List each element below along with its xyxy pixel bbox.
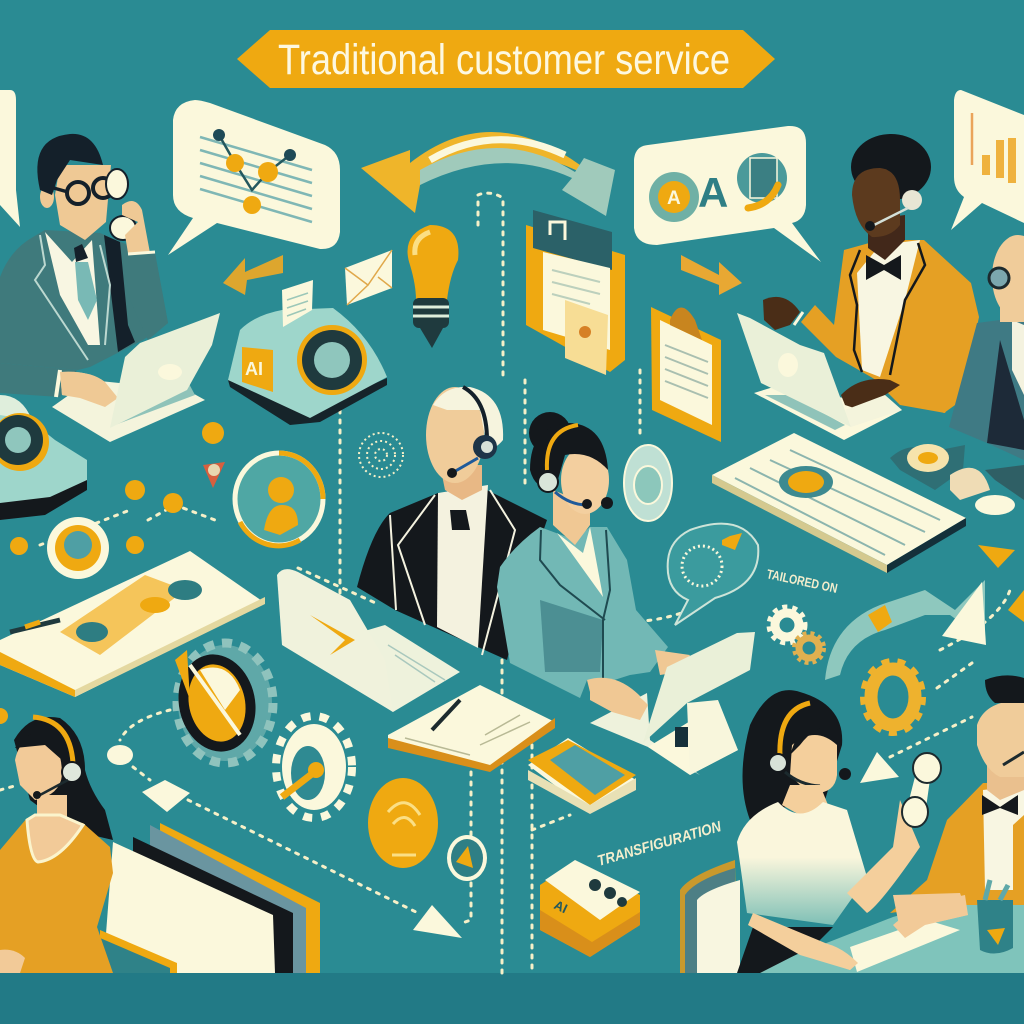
desktop keyboard and cup: [800, 880, 1013, 972]
small device AI: [540, 860, 640, 957]
icon: digital brain cloud: [359, 433, 403, 477]
title banner: Traditional customer service: [278, 36, 730, 84]
clipboard: [651, 307, 721, 442]
icon: gold coin: [368, 778, 438, 868]
icon: rings and nodes left: [10, 422, 225, 579]
icon: circular arrow button: [447, 835, 487, 881]
plate and hand: right: [890, 444, 1024, 515]
icon: AI rotary phone: AI: [245, 359, 263, 379]
curved growth arrow: [825, 545, 1024, 680]
folders and documents: [526, 210, 625, 375]
laptop: left agent: [52, 313, 220, 442]
label: transfiguration: TRANSFIGURATION: [595, 818, 724, 870]
rotary phone: left edge: [0, 395, 87, 520]
icon: cream gear: [276, 716, 352, 818]
icon: arrow left: [223, 255, 283, 295]
small device AI: AI: [552, 897, 570, 916]
speech bubble: left edge: [0, 90, 20, 227]
person: bald agent with glasses, right edge: [949, 235, 1024, 460]
books and screen: bottom left: [100, 823, 320, 973]
open book: left: [0, 551, 265, 697]
icon: AI rotary phone: [228, 280, 387, 425]
person: agent in orange blazer: [763, 134, 979, 413]
speech bubble: AI: A: [667, 188, 681, 209]
person: bottom right female agent: [737, 690, 920, 973]
person: central female agent: [497, 412, 690, 707]
open book: centre: [388, 685, 555, 772]
gauge gear: [170, 643, 273, 763]
laptop: right agent: [737, 313, 902, 440]
person: agent with glasses and phone: [0, 134, 168, 407]
person: bottom left agent: [0, 717, 113, 973]
laptop: centre: [277, 569, 460, 712]
icon: gold accent left edge: [0, 708, 8, 724]
speech bubble: process chart: [168, 100, 340, 255]
desk and keyboard: bottom right: [750, 887, 1024, 973]
speech bubble: bar chart: [951, 90, 1024, 230]
handset phone: [902, 753, 941, 827]
icon: gold gear: [863, 661, 923, 733]
person: central male agent: [357, 387, 547, 660]
chair: bottom right: [680, 860, 740, 973]
keyboard document panel: [712, 433, 966, 573]
speech bubble: network heart: [668, 524, 758, 625]
icon: light bulb: [408, 225, 458, 348]
speech bubble: AI: A: [698, 169, 728, 216]
icon: triangle markers: [107, 745, 899, 938]
curved arrows: [361, 132, 615, 216]
person: bottom right male agent: [890, 675, 1024, 930]
laptop: central woman: [590, 632, 755, 775]
label: tailored: TAILORED ON: [765, 566, 839, 596]
icon: target coin: [624, 445, 672, 521]
speech bubble: AI: [634, 126, 821, 262]
icon: envelope: [345, 250, 392, 305]
icon: gears right: [769, 607, 824, 663]
icon: arrow right: [681, 255, 742, 295]
stacked cards: [528, 738, 636, 814]
icon: profile ring: [235, 453, 323, 546]
